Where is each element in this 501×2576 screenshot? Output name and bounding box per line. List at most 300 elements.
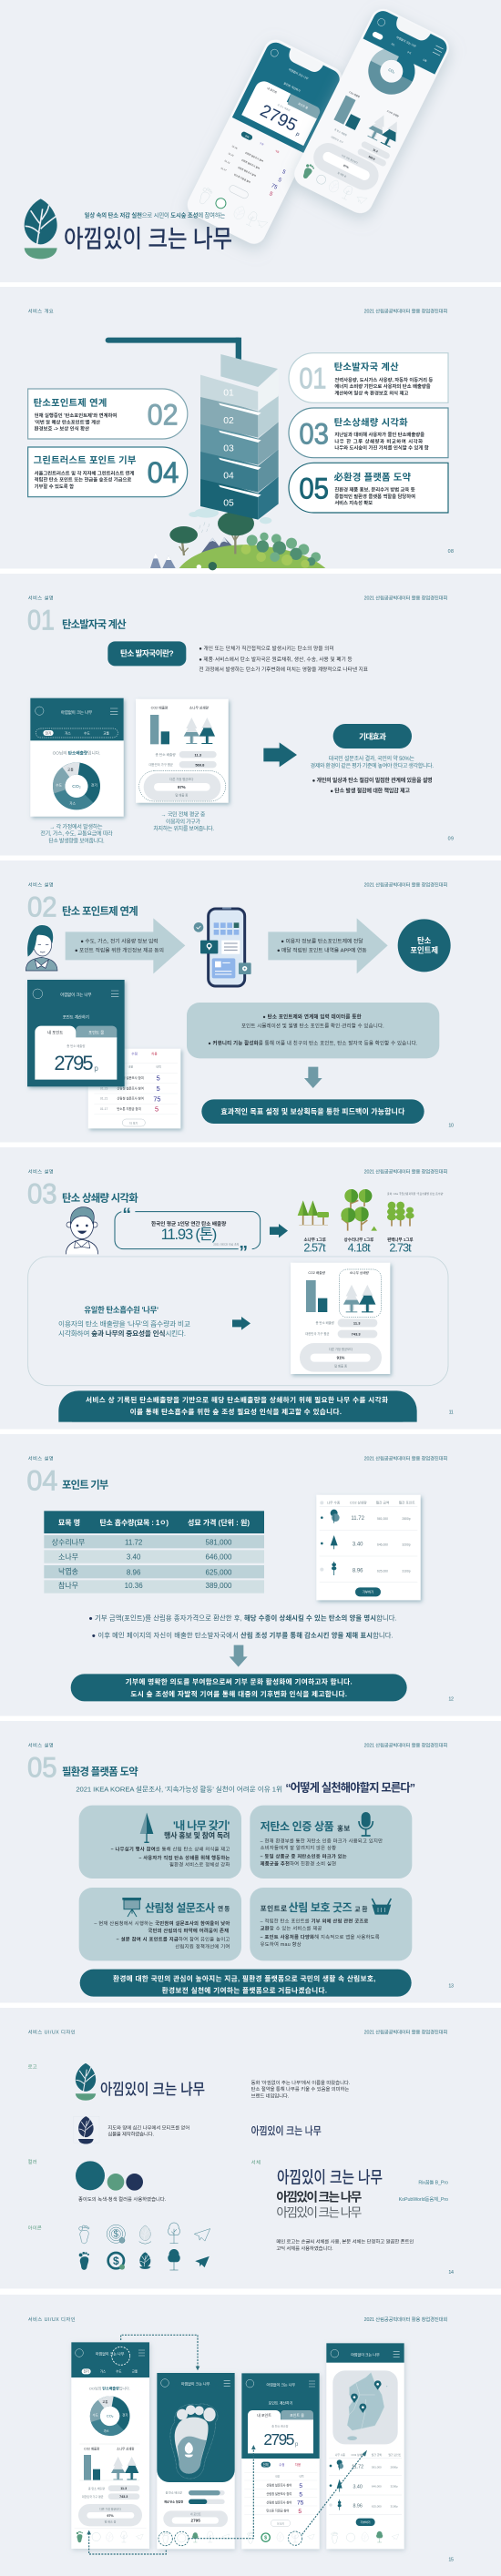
caption: left: 탄소 발생량을 보여줍니다.	[48, 837, 105, 844]
screen 2: footprint: 내 포인트	[190, 2511, 201, 2516]
slide header: 2021 산림공공빅데이터 활용 창업경진대회	[364, 1455, 447, 1462]
card: 03 offset visualisation: 03	[299, 416, 329, 450]
icon row: filled	[79, 2249, 210, 2270]
stacked steps diagram: 01	[223, 388, 234, 398]
card: 05 platform: 종합적인 필환경 플랫폼 역할을 담당하여	[334, 493, 415, 500]
phone mockup: points screen: 01.17	[220, 167, 227, 172]
screen 3: points: 내용	[275, 2474, 281, 2478]
screen 1: dashboard: OO님의 탄소배출량입니다.	[89, 2385, 130, 2390]
app card: list: 산림청 설문조사 참여	[117, 1075, 144, 1080]
phone mockup: footprint dashboard: 수도	[406, 50, 413, 56]
definition badge	[107, 641, 186, 666]
screen 2: footprint: 예상 탄소 절감량	[164, 2499, 183, 2503]
phone mockup: points screen: 차용	[274, 149, 281, 155]
screen 1: dashboard: 97%	[107, 2514, 114, 2518]
screen 1: dashboard: 교통	[132, 2369, 138, 2374]
donut chart: CO₂	[107, 2414, 114, 2418]
app card: usage donut: OO님의 탄소배출량입니다.	[53, 749, 100, 756]
phone mockup: footprint dashboard: 덜 배출 중	[337, 171, 348, 178]
typeface description: 고딕 서체를 사용하였습니다.	[276, 2245, 333, 2252]
data table: 묘목 명	[58, 1518, 80, 1527]
app card: points: 포인트 몰	[88, 1029, 104, 1034]
app card: usage donut: 가스	[65, 731, 71, 736]
card: survey: 산림지원 정책개선에 기여	[175, 1942, 230, 1950]
big arrow: transfer: ● 이용자 정보를 탄소포인트제에 전달	[281, 938, 363, 945]
screen 1: dashboard: 아낌없이 크는 나무	[96, 2351, 125, 2357]
app card: tree list: 11.72	[351, 1516, 365, 1522]
app card: points: 2795	[54, 1052, 94, 1074]
card: goods: – 적립한 탄소 포인트를 기부 외에 산림 관련 굿즈로	[261, 1918, 368, 1925]
symbol description: 심볼을 제작하였습니다.	[107, 2131, 154, 2138]
donut chart: 수도	[93, 2412, 98, 2417]
app card: list: 산림청 설문조사 참여	[117, 1096, 144, 1101]
typeface description: 메인 로고는 손글씨 서체를 사용, 본문 서체는 단정하고 깔끔한 폰트인	[276, 2238, 414, 2245]
phone mockup: points screen: 수정	[259, 141, 264, 147]
card: survey: – 현재 산림청에서 시행하는 국민참여 설문조사의 참여율이 낮아	[94, 1919, 230, 1927]
page number: 13	[448, 1983, 454, 1989]
panel: 01 carbon footprint	[27, 595, 454, 844]
card: 04 donation: 기부할 수 있도록 함	[35, 483, 74, 490]
phone mockup: points screen: 5	[281, 169, 287, 176]
phone mockup: points screen: 산림청 설문조사 참여	[240, 158, 261, 170]
logo description	[251, 2079, 350, 2099]
caption: left: 전기, 가스, 수도, 교통요금에 따라	[40, 830, 113, 838]
icon row: outline	[79, 2223, 210, 2244]
app card: tree offset: 11.3	[353, 1320, 361, 1325]
app card: usage donut	[30, 698, 124, 817]
page number: 14	[448, 2270, 454, 2276]
quote box: 2021 OECD 자료 출처	[213, 1243, 240, 1247]
quote box: 한국인 평균 1인당 연간 탄소 배출량	[151, 1220, 227, 1227]
caption: left: → 각 가정에서 발생하는	[49, 823, 103, 830]
big arrow: input: ● 포인트 적립을 위한 개인정보 제공 동의	[75, 946, 164, 953]
typeface samples	[276, 2168, 448, 2219]
arrow down	[230, 1645, 248, 1667]
phone mockup: footprint dashboard: 가스	[390, 42, 396, 47]
bullets: ● 기부 금액(포인트)를 산림용 종자가격으로 환산한 후, 해당 수종이 상쇄시킬 수 있는 탄소의 양을 명시합니다.	[88, 1614, 397, 1622]
bullets	[88, 1614, 397, 1640]
card: goods	[250, 1888, 412, 1960]
stat: pine: 소나무 1그루	[303, 1237, 326, 1243]
card: my tree: '내 나무 갖기'	[173, 1818, 230, 1832]
app card: usage donut: 교통	[103, 731, 110, 736]
page number: 09	[448, 836, 454, 841]
app card: tree list: 646,000	[377, 1543, 388, 1547]
screen 3: points: 총 탄소 배출량	[271, 2424, 289, 2428]
phone mockup: points screen: 내 포인트	[266, 86, 279, 95]
card: 04 donation: 적립한 탄소 포인트 또는 현금을 숲조성 기금으로	[35, 476, 131, 484]
slide header	[28, 1455, 447, 1462]
conclusion pill	[58, 1390, 417, 1422]
phone mockup: points screen: 포인트 몰	[297, 101, 310, 110]
screen 3: points	[241, 2373, 320, 2549]
phone mockup: footprint dashboard: 총 탄소 배출량	[333, 127, 348, 137]
screen 1: dashboard: 대한민국 가구 평균	[82, 2494, 104, 2499]
app card: tree list: 월간 포인트	[399, 1501, 415, 1505]
card: survey: 연동	[218, 1905, 230, 1913]
logo symbol	[25, 199, 57, 259]
caption: right: → 국민 전체 평균 중	[161, 811, 206, 819]
app card: tree offset: 91%	[337, 1356, 344, 1360]
donut chart: 가스	[69, 801, 77, 806]
data table: 646,000	[206, 1553, 232, 1562]
slide header: 2021 산림공공빅데이터 활용 창업경진대회	[364, 2316, 447, 2323]
section title: 필환경 플랫폼 도약	[62, 1765, 138, 1777]
data table: 581,000	[206, 1538, 232, 1546]
app card: tree list: 581,000	[377, 1517, 388, 1521]
card: goods: – 포인트 사용처를 다양화해 지속적으로 앱을 사용하도록	[261, 1933, 380, 1940]
screen 1: dashboard: CO2 배출량	[84, 2447, 99, 2451]
illustration: citizen	[66, 1207, 98, 1254]
card: low carbon: 제품군을 추천하여 친환경 소비 실현	[261, 1859, 336, 1867]
section title: 탄소 포인트제 연계	[62, 904, 138, 917]
app card: comparison: 덜 배출 중	[175, 792, 188, 797]
panel: 05 platform	[27, 1742, 454, 1997]
phone mockup: footprint dashboard: CO₂	[388, 67, 396, 75]
typeface samples: KoPubWorld돋움체_Pro	[399, 2195, 448, 2203]
app card: list: 더 보기	[129, 1120, 138, 1125]
app card: usage donut: 수도	[84, 731, 90, 736]
app card: tree list: 625,000	[377, 1569, 388, 1573]
phone mockup: points screen: 탄소툰 지원금 참여	[233, 173, 251, 184]
screen 3: points: 산림청 설문조사 참여	[266, 2500, 291, 2504]
icons: cypress group	[387, 1202, 414, 1227]
map of Korea	[332, 2370, 398, 2444]
big arrow: transfer	[268, 918, 388, 973]
phone mockup: points screen	[183, 36, 346, 248]
icon row: outline: $	[114, 2230, 119, 2240]
slide header	[28, 1742, 447, 1749]
app card: tree offset: 덜 배출 중	[334, 1363, 347, 1368]
phone mockup: points screen: 산림청 설문조사 참여	[244, 151, 264, 163]
section number: 03	[27, 1177, 57, 1209]
section number: 04	[26, 1464, 57, 1496]
card: 03 offset visualisation: 나무 한 그루 상쇄량과 비교하여 시각화	[334, 437, 423, 444]
app card: points: 포인트 계산하기	[63, 1014, 89, 1021]
slide header: 서비스 설명	[28, 1168, 54, 1176]
stat: cypress	[387, 1237, 414, 1254]
screen 4: map: 3100p	[391, 2504, 398, 2508]
tree text: 유일한 탄소흡수원 '나무'	[84, 1305, 158, 1314]
app card: tree list: 3100p	[402, 1569, 411, 1573]
card: my tree: – 사용자가 직접 탄소 상쇄를 위해 행동하는	[138, 1854, 230, 1861]
quote box: ”	[239, 1244, 248, 1263]
screen 2: footprint	[157, 2373, 235, 2549]
slide header	[28, 595, 447, 602]
slide header	[28, 2316, 447, 2323]
slide header: 서비스 개요	[28, 308, 54, 315]
arrow	[232, 1317, 250, 1330]
label: icons: 아이콘	[28, 2225, 42, 2232]
card: 05 platform: 05	[299, 471, 329, 504]
app card: list: 01.21	[100, 1097, 107, 1101]
page number: 10	[448, 1123, 454, 1128]
donut chart: 수도	[56, 782, 63, 787]
card: my tree	[79, 1806, 241, 1879]
conclusion pill	[80, 1970, 412, 1997]
app card: list: 내용	[128, 1064, 133, 1069]
stacked steps diagram: 04	[223, 471, 234, 481]
app card: tree offset: 743.3	[352, 1332, 361, 1337]
card: 01 carbon footprint: 전력사용량, 도시가스 사용량, 자동차 이동거리 등	[334, 376, 433, 383]
quote box	[115, 1206, 261, 1263]
icon: smartphone	[194, 908, 251, 986]
panel: 03 offset visualisation	[27, 1168, 454, 1422]
donut chart: CO₂	[72, 784, 81, 789]
app card: list: 산림청 설문조사 참여	[117, 1085, 144, 1090]
slide header: 서비스 설명	[28, 595, 54, 602]
symbol description	[107, 2123, 189, 2138]
app card: points: 총 탄소 배출량	[66, 1044, 85, 1048]
label: color: 컬러	[28, 2158, 37, 2165]
data table: 상수리나무	[52, 1537, 85, 1546]
badge: carbon point: 탄소	[417, 936, 432, 945]
slide header: 2021 산림공공빅데이터 활용 창업경진대회	[364, 2029, 447, 2036]
screen 3: points: 포인트 계산하기	[269, 2399, 293, 2405]
screen 4: map: 625,000	[372, 2504, 382, 2508]
app card: comparison: 569.8	[195, 762, 205, 767]
app card: list: 내역	[156, 1064, 161, 1069]
app card: comparison: 다른 가정 평균보다	[169, 777, 194, 781]
screen 4: map: 월간 금액	[372, 2453, 382, 2457]
conclusion pill	[201, 1099, 424, 1124]
app card: points: 내 포인트	[47, 1029, 63, 1035]
slide header: 서비스 설명	[28, 881, 54, 889]
screen 3: points: 2795	[263, 2430, 294, 2449]
phone mockup: footprint dashboard: 아낌없이 크는 나무	[395, 35, 417, 48]
conclusion pill: 효과적인 목표 설정 및 보상획득을 통한 피드백이 가능합니다	[220, 1107, 405, 1116]
screen 4: map: 8.96	[353, 2504, 363, 2510]
slide header: 2021 산림공공빅데이터 활용 창업경진대회	[364, 881, 447, 889]
card: survey: 국민의 산림의식 파악에 어려움이 존재	[148, 1927, 229, 1934]
card: low carbon	[250, 1806, 412, 1879]
card: survey	[79, 1888, 241, 1960]
illustration: forest hill	[150, 508, 325, 570]
screen 3: points: 5	[298, 2509, 302, 2515]
definition text: ● 제품·서비스에서 탄소 발자국은 원료채취, 생산, 수송, 사용 및 폐기 등	[199, 656, 353, 663]
phone mockup: points screen: 총 탄소 배출량	[277, 103, 291, 113]
data table: 8.96	[127, 1568, 141, 1576]
slide header: 서비스 UI/UX 디자인	[28, 2029, 76, 2036]
data table: 3.40	[127, 1553, 141, 1562]
app card: list: 75	[153, 1095, 160, 1103]
survey quote: “어떻게 실천해야할지 모른다”	[285, 1780, 415, 1794]
app card: comparison	[136, 699, 229, 803]
slide header: 2021 산림공공빅데이터 활용 창업경진대회	[364, 1168, 447, 1176]
typeface samples: Rix꿈틀 B_Pro	[418, 2179, 448, 2185]
screen 4: map: 646,000	[372, 2485, 382, 2489]
card: low carbon: – 현재 환경부를 통한 저탄소 인증 마크가 사용되고 있지만	[261, 1837, 383, 1844]
app card: list: 탄소툰 지원금 참여	[117, 1106, 141, 1111]
flow arrows	[87, 2335, 367, 2554]
app card: list: 5	[157, 1084, 160, 1093]
phone mockup: footprint dashboard: 교통	[422, 57, 428, 63]
illustration: user	[26, 925, 57, 971]
card: 01 carbon footprint: 01	[299, 361, 326, 395]
card: 05 platform: 必환경 플랫폼 도약	[334, 471, 411, 483]
slide header	[28, 1168, 447, 1176]
source note: 출처: 1ha 국립산림과학원 '주요수종별 탄소 흡수량'	[387, 1192, 444, 1196]
card: my tree: 행사 홍보 및 참여 독려	[164, 1830, 230, 1839]
conclusion pill: 기부에 명확한 의도를 부여함으로써 기부 문화 활성화에 기여하고자 합니다.	[126, 1677, 353, 1686]
app card: tree list: 월간 금액	[376, 1501, 389, 1505]
phone mockup: points screen: 전체	[244, 134, 250, 139]
connector arrow	[106, 338, 246, 375]
app card: tree list: 3200p	[402, 1543, 411, 1547]
screen 1: dashboard: 수도	[116, 2369, 121, 2374]
logo description: 브랜드 네임입니다.	[251, 2092, 289, 2099]
app card: list: 5	[157, 1074, 160, 1083]
card: 03 offset visualisation: 탄소상쇄량 시각화	[334, 416, 408, 428]
screen 3: points: $	[264, 2536, 267, 2541]
phone mockup: points screen: 5	[268, 191, 274, 198]
colour swatches	[76, 2161, 143, 2191]
caption: right: 이용자의 가구가	[166, 818, 200, 825]
card: 02 point link	[28, 389, 188, 439]
section title: 포인트 기부	[62, 1478, 108, 1491]
stat: cypress: 편백나무 1그루	[387, 1237, 414, 1243]
card: my tree: 필환경 서비스로 정체성 강화	[169, 1861, 230, 1868]
typeface samples: 아낌있이 크는 나무	[277, 2168, 383, 2186]
screen 4: map: 나무 수종	[335, 2453, 345, 2457]
data table: 참나무	[58, 1581, 78, 1590]
tagline: 일상 속의 탄소 저감 실천으로 시민이 도시숲 조성에 참여하는	[85, 210, 226, 219]
data table: 389,000	[206, 1582, 232, 1590]
slide header: 서비스 설명	[28, 1455, 54, 1462]
stat: pine: 2.57t	[303, 1241, 326, 1254]
screen 1: dashboard: 소나무 상쇄량	[117, 2447, 134, 2451]
phone mockup: points screen: 75	[271, 183, 279, 191]
arrow	[270, 1224, 288, 1237]
card: survey: 산림청 설문조사	[145, 1901, 215, 1915]
screen 3: points: 전체	[263, 2462, 269, 2467]
app card: list: 01.17	[100, 1107, 107, 1111]
data table: 10.36	[125, 1582, 143, 1590]
donut chart: 전기	[122, 2412, 128, 2417]
card: 03 offset visualisation: 나무와 도시숲이 가진 가치를 인식할 수 있게 함	[334, 443, 429, 451]
screen 2: footprint: 총 탄소 배출량	[166, 2490, 182, 2495]
card: 01 carbon footprint: 계산하여 일상 속 환경보호 의식 제고	[334, 389, 408, 396]
phone mockup: points screen: 포인트 계산하기	[283, 81, 302, 93]
survey line: 2021 IKEA KOREA 설문조사, '지속가능성 활동' 실천이 어려운 이유 1위	[76, 1784, 282, 1793]
logo description: 탄소 절약을 통해 나무를 키울 수 있음을 의미하는	[251, 2085, 349, 2092]
panel: service overview	[28, 308, 454, 570]
screen 3: points: 5	[299, 2491, 302, 2498]
card: low carbon: 홍보	[337, 1823, 350, 1832]
logo description: 동화 '아낌없이 주는 나무'에서 이름을 따왔습니다.	[251, 2079, 350, 2086]
card: goods: 유도하여 mau 향상	[261, 1940, 302, 1948]
card: goods: 산림 보호 굿즈	[289, 1901, 353, 1914]
app card: points: 아낌없이 크는 나무	[60, 992, 91, 998]
phone mockup: points screen: 산림청 설문조사 참여	[237, 166, 257, 178]
phone mockup: footprint dashboard: 97%	[343, 164, 350, 169]
card: my tree: – 나무심기 행사 참여를 통해 산림 탄소 상쇄 의식을 제고	[111, 1846, 230, 1853]
app card: list: 수정	[131, 1051, 138, 1055]
label: logo: 로고	[28, 2064, 37, 2071]
card: 04 donation	[28, 447, 188, 497]
card: low carbon: – 동일 상품군 중 저탄소인증 마크가 있는	[261, 1853, 347, 1860]
app card: tree list: 8.96	[353, 1568, 363, 1573]
slide header	[28, 2029, 447, 2036]
screen 3: points: 탄소툰 지원금 참여	[266, 2509, 289, 2513]
effect text: ● 탄소 발생 절감에 대한 책임감 제고	[330, 788, 410, 795]
screen 1: dashboard: 가스	[100, 2369, 106, 2374]
typeface description	[276, 2238, 414, 2252]
donut chart	[56, 767, 97, 806]
screen 4: map: 3.40	[353, 2484, 363, 2489]
screen 4: map: 기부하기	[361, 2520, 371, 2524]
slide header	[28, 308, 447, 315]
phone mockup: points screen: p	[295, 131, 301, 138]
conclusion pill: 환경보전 실천에 기여하는 플랫폼으로 거듭나겠습니다.	[162, 1985, 327, 1994]
screen 4: map: 아낌없이 크는 나무	[351, 2352, 380, 2357]
screen 4: map: 11.72	[352, 2465, 363, 2470]
app card: comparison: 대한민국 가구 평균	[148, 762, 173, 767]
data table: 탄소 흡수량(묘목 : 1ㅇ)	[99, 1518, 169, 1527]
data table: 소나무	[58, 1553, 78, 1562]
panel: 02 point link	[26, 881, 454, 1128]
phone mockup: footprint dashboard: 11.3	[373, 148, 379, 154]
screen 3: points: 내 포인트	[257, 2412, 271, 2418]
slide header: 2021 산림공공빅데이터 활용 창업경진대회	[364, 308, 447, 315]
screen 3: points: 수정	[279, 2462, 284, 2467]
phone mockup: points screen: 아낌없이 크는 나무	[288, 66, 310, 81]
screen 1: dashboard: 다른 가정 평균보다	[99, 2506, 121, 2510]
main logo: 아낌있이 크는 나무	[100, 2081, 205, 2098]
section title: 탄소발자국 계산	[62, 617, 127, 630]
badge: expected effect: 기대효과	[359, 731, 386, 741]
main logo	[76, 2063, 205, 2101]
colour description: 종이도의 녹색-청색 컬러를 사용하였습니다.	[78, 2195, 166, 2203]
screen 4: map	[326, 2343, 404, 2549]
app card: list: 5	[155, 1105, 158, 1114]
app card: tree list: 기부하기	[363, 1590, 373, 1594]
info panel: ● 커뮤니티 기능 활성화를 통해 어플 내 친구의 탄소 포인트, 탄소 발자국 등을 확인할 수 있습니다.	[208, 1040, 418, 1047]
data table: 625,000	[206, 1568, 232, 1576]
card: 01 carbon footprint: 탄소발자국 계산	[334, 361, 399, 373]
app card: list: 차용	[151, 1051, 158, 1055]
card: 05 platform	[289, 463, 448, 513]
card: 04 donation: 서울그린트러스트 및 각 지자체 그린트러스트 연계	[35, 470, 134, 477]
phone mockup: footprint dashboard: CO2 배출량	[349, 90, 361, 99]
info panel: 포인트 시뮬레이션 및 월별 탄소 포인트를 확인·관리할 수 있습니다.	[241, 1022, 384, 1029]
stacked steps diagram: 05	[223, 498, 234, 508]
conclusion pill remainder	[66, 1420, 410, 1422]
phone mockup: footprint dashboard: 소나무 상쇄량	[386, 109, 400, 118]
app card: usage donut: 아낌없이 크는 나무	[61, 709, 92, 716]
app card: tree list: 3.40	[353, 1543, 363, 1548]
phone mockup: points screen: 2795	[257, 101, 300, 136]
app card: tree offset: 다른 가정 평균보다	[329, 1347, 353, 1351]
outlined panel	[28, 1257, 448, 1386]
app card: tree list: CO2 상쇄량	[350, 1501, 367, 1505]
app card: comparison: 11.3	[195, 752, 202, 757]
screen 3: points: 아낌없이 크는 나무	[267, 2381, 295, 2387]
quote box: 11.93 (톤)	[161, 1226, 217, 1243]
card: 02 point link: 현재 실행중인 '탄소포인트제'와 연계하여	[35, 412, 117, 419]
card: 05 platform: 서비스 지속성 확보	[334, 499, 373, 506]
card: 03 offset visualisation	[289, 408, 448, 458]
slide header	[28, 881, 447, 889]
effect text: 대국민 설문조사 결과, 국민의 약 50%는	[329, 755, 414, 762]
icons: oak group	[341, 1189, 377, 1231]
app card: tree list	[316, 1495, 421, 1600]
screen 4: map: CO2 상쇄량	[351, 2453, 364, 2457]
phone mockup: footprint dashboard: 대한민국 가구	[331, 135, 344, 145]
symbol description: 지도와 땅에 심긴 나무에서 모티프를 얻어	[107, 2123, 189, 2131]
section number: 05	[27, 1751, 57, 1783]
screen 3: points: 포인트 몰	[290, 2412, 304, 2418]
